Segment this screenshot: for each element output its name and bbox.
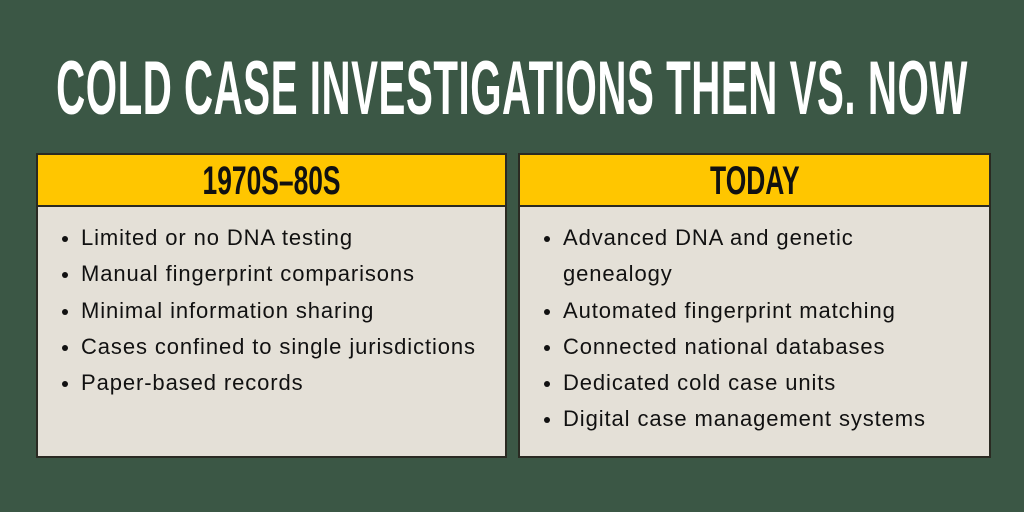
heading: 1970s-80s: 1970S–80S xyxy=(202,159,341,203)
list: then: Manual fingerprint comparisons xyxy=(81,261,415,286)
panel: 1970s-80s xyxy=(36,153,507,458)
list: now: Advanced DNA and genetic xyxy=(563,225,854,250)
heading: today: TODAY xyxy=(710,159,799,203)
heading: today xyxy=(520,155,989,207)
list: now: Dedicated cold case units xyxy=(563,370,836,395)
list: then: Cases confined to single jurisdictions xyxy=(81,334,476,359)
list: then: Minimal information sharing xyxy=(81,298,374,323)
list: then: Paper-based records xyxy=(81,370,304,395)
title: COLD CASE INVESTIGATIONS THEN VS. NOW xyxy=(56,46,968,131)
list: now xyxy=(544,225,926,431)
list: now: Digital case management systems xyxy=(563,406,926,431)
heading: 1970s-80s xyxy=(38,155,505,207)
list: now: Connected national databases xyxy=(563,334,885,359)
list: now: genealogy xyxy=(563,261,673,286)
list: now: Automated fingerprint matching xyxy=(563,298,896,323)
list: then xyxy=(62,225,476,395)
list: then: Limited or no DNA testing xyxy=(81,225,353,250)
panel: today xyxy=(518,153,991,458)
